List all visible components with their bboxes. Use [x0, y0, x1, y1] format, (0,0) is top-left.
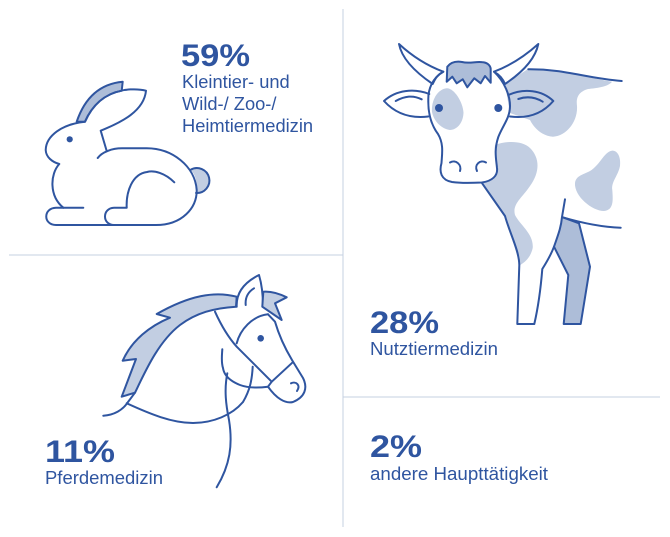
icon: cow [384, 44, 622, 324]
heading: 59%: 59% [181, 37, 250, 73]
heading: 11%: 11% [45, 433, 115, 469]
label: small animals: Kleintier- und [182, 71, 290, 92]
icon: horse [103, 275, 305, 487]
label: farm animals: Nutztiermedizin [370, 338, 498, 359]
label: small animals: Heimtiermedizin [182, 115, 313, 136]
panel: other [370, 428, 548, 484]
panel: rabbit, small animals [46, 37, 313, 225]
panel: horse [45, 275, 305, 488]
panel: cow, farm animals [370, 44, 622, 359]
label: other main activity: andere Haupttätigkeit [370, 463, 548, 484]
heading: 2%: 2% [370, 428, 422, 464]
label: horses: Pferdemedizin [45, 467, 163, 488]
icon: rabbit [46, 82, 209, 225]
heading: 28%: 28% [370, 304, 439, 340]
label: small animals: Wild-/ Zoo-/ [182, 93, 277, 114]
